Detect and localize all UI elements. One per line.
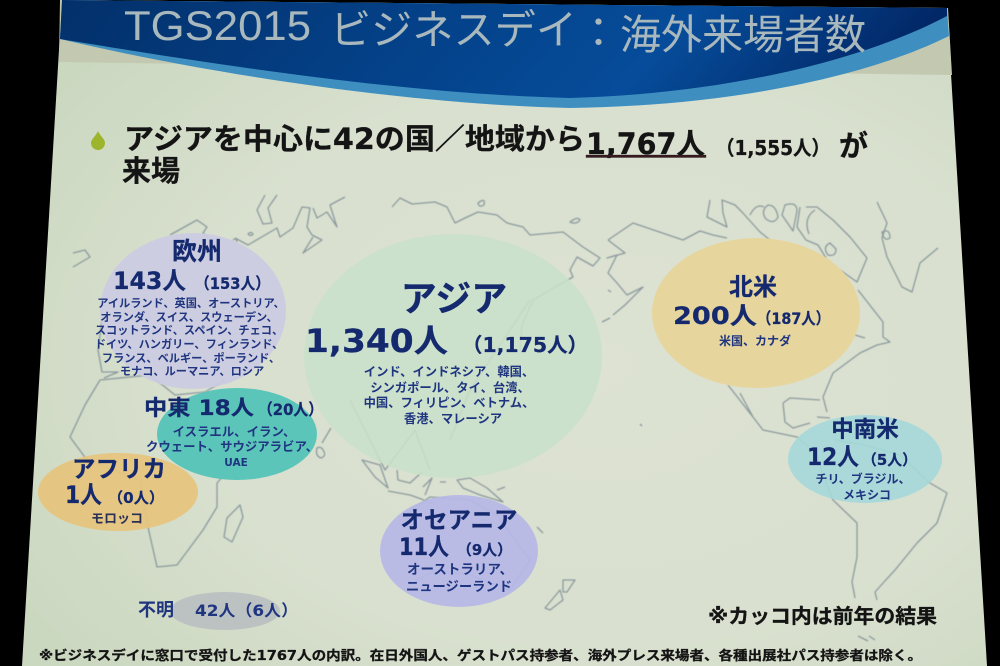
bubble: africa bbox=[38, 453, 198, 531]
region text: middle east: 中東 18人 bbox=[144, 396, 254, 420]
region text: oceania: オセアニア bbox=[400, 506, 518, 534]
region text: asia: 中国、フィリピン、ベトナム、 bbox=[364, 395, 534, 410]
region text: oceania bbox=[399, 506, 518, 595]
region text: oceania: オーストラリア、 bbox=[407, 562, 513, 578]
indonesia bbox=[362, 460, 505, 503]
headline: （1,555人） bbox=[716, 136, 830, 160]
bullet icon bbox=[91, 131, 105, 150]
bubble: unknown bbox=[170, 592, 280, 630]
region bubbles bbox=[38, 233, 942, 630]
greenland bbox=[877, 202, 938, 292]
region text: asia: シンガポール、タイ、台湾、 bbox=[370, 380, 530, 395]
region text: latin america: メキシコ bbox=[843, 488, 891, 502]
region text: unknown bbox=[138, 600, 298, 621]
region text: oceania: 11人 bbox=[399, 533, 449, 561]
region text: unknown: 42人（6人） bbox=[195, 601, 298, 620]
region text: europe: フランス、ベルギー、ポーランド、 bbox=[102, 352, 280, 365]
region text: latin america bbox=[807, 417, 917, 502]
region text: north america: 200人 bbox=[673, 302, 757, 330]
bubble: asia bbox=[304, 234, 602, 478]
region text: africa: （0人） bbox=[108, 489, 164, 507]
iceland bbox=[73, 250, 90, 267]
region text: middle east: UAE bbox=[224, 457, 248, 469]
region text: oceania: （9人） bbox=[457, 541, 512, 559]
region text: europe: スコットランド、スペイン、チェコ、 bbox=[95, 324, 283, 337]
region text: europe: オランダ、スイス、スウェーデン、 bbox=[100, 310, 278, 324]
top shaded strip bbox=[59, 0, 952, 75]
new zealand bbox=[545, 580, 575, 610]
australia bbox=[405, 497, 530, 590]
title: TGS2015 bbox=[124, 2, 311, 49]
region text: europe: （153人） bbox=[195, 274, 270, 293]
region text: europe: アイルランド、英国、オーストリア、 bbox=[97, 296, 285, 310]
title: ビジネスデイ bbox=[330, 7, 577, 53]
region text: africa: モロッコ bbox=[91, 512, 143, 527]
bubble: europe bbox=[100, 233, 286, 389]
europe and north africa bbox=[70, 375, 225, 460]
bubble: middle east bbox=[157, 388, 317, 480]
region text: north america: 北米 bbox=[729, 273, 777, 301]
north america east coast bbox=[783, 290, 890, 428]
region text: europe: 欧州 bbox=[172, 237, 222, 266]
region text: europe bbox=[95, 237, 285, 378]
africa south bbox=[87, 432, 262, 567]
region text: north america: 米国、カナダ bbox=[719, 333, 791, 348]
headline: が bbox=[839, 129, 868, 163]
world map outlines bbox=[70, 195, 947, 641]
greenland side europe bbox=[170, 207, 322, 253]
alaska bbox=[602, 223, 727, 322]
region text: latin america: チリ、ブラジル、 bbox=[815, 471, 911, 486]
region text: europe: ドイツ、ハンガリー、フィンランド、 bbox=[95, 337, 283, 351]
headline bbox=[122, 122, 868, 188]
region text: middle east bbox=[144, 396, 323, 469]
region text: latin america: （5人） bbox=[862, 451, 917, 469]
region text: asia: アジア bbox=[401, 279, 507, 320]
south america bbox=[815, 440, 947, 600]
arctic canada bbox=[707, 200, 867, 282]
madagascar bbox=[224, 505, 243, 542]
region text: middle east: （20人） bbox=[258, 400, 323, 419]
region text: oceania: ニュージーランド bbox=[406, 580, 512, 595]
region text: africa: 1人 bbox=[65, 481, 102, 509]
region text: asia: 1,340人 bbox=[305, 322, 448, 360]
footnote: ※ビジネスデイに窓口で受付した1767人の内訳。在日外国人、ゲストパス持参者、海外プレス来場者、各種出展社パス持参者は除く。 bbox=[39, 648, 922, 664]
region text: asia: （1,175人） bbox=[462, 333, 588, 357]
bubble: north america bbox=[652, 238, 860, 388]
region text: africa bbox=[65, 455, 166, 527]
region text: unknown: 不明 bbox=[138, 600, 174, 621]
region text: north america bbox=[673, 273, 830, 348]
region text: latin america: 12人 bbox=[807, 443, 859, 471]
bubble: latin america bbox=[788, 415, 942, 503]
mexico and baja bbox=[728, 385, 815, 452]
region text: africa: アフリカ bbox=[72, 455, 166, 483]
region text: asia bbox=[305, 279, 588, 426]
region text: europe: 143人 bbox=[113, 267, 186, 295]
headline: 来場 bbox=[122, 154, 180, 188]
region text: north america: （187人） bbox=[757, 309, 830, 328]
title: 海外来場者数 bbox=[620, 12, 866, 58]
region text: middle east: イスラエル、イラン、 bbox=[173, 424, 295, 439]
headline: 1,767人 bbox=[586, 127, 705, 161]
region text: latin america: 中南米 bbox=[831, 417, 899, 443]
russia coast bbox=[392, 198, 600, 352]
title bbox=[124, 2, 866, 58]
header banner bbox=[60, 0, 949, 108]
region text: asia: インド、インドネシア、韓国、 bbox=[364, 364, 534, 379]
headline: アジアを中心に42の国／地域から bbox=[124, 122, 585, 156]
india and arabia bbox=[316, 428, 331, 458]
note: brackets: ※カッコ内は前年の結果 bbox=[708, 604, 937, 628]
bubble: oceania bbox=[380, 495, 538, 607]
region text: middle east: クウェート、サウジアラビア、 bbox=[146, 439, 318, 454]
region text: asia: 香港、マレーシア bbox=[404, 411, 502, 426]
title: ： bbox=[578, 10, 619, 56]
region text: europe: モナコ、ルーマニア、ロシア bbox=[120, 365, 264, 378]
